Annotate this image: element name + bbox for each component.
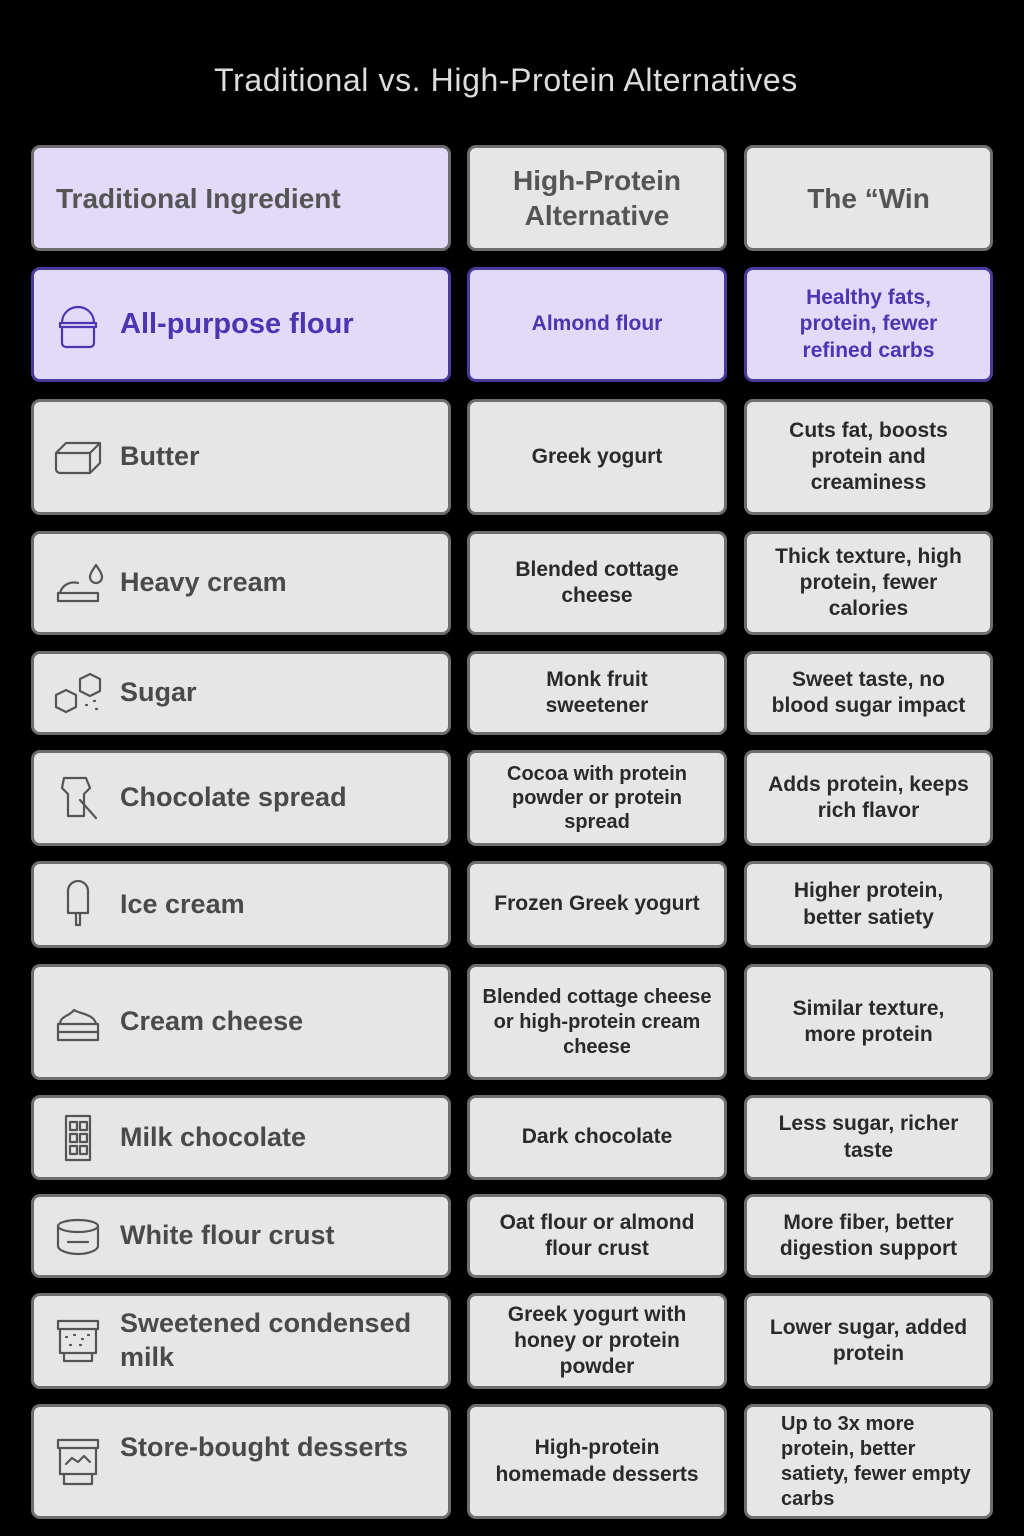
alt: almond flour bbox=[467, 267, 727, 382]
header: alternative: High-Protein Alternative bbox=[513, 165, 681, 231]
alt: frozen greek yogurt bbox=[467, 861, 727, 948]
row: butter bbox=[31, 399, 451, 515]
win: cream cheese bbox=[744, 964, 993, 1080]
row: cream cheese: Cream cheese bbox=[120, 1006, 303, 1036]
row: ice cream bbox=[31, 861, 451, 948]
win: ice cream: Higher protein, better satiety bbox=[794, 879, 943, 928]
row: white flour crust: White flour crust bbox=[120, 1220, 334, 1250]
win: butter bbox=[744, 399, 993, 515]
win: condensed milk: Lower sugar, added protein bbox=[770, 1316, 967, 1365]
row: milk chocolate: Milk chocolate bbox=[120, 1122, 306, 1152]
alt: greek yogurt: Greek yogurt bbox=[532, 445, 662, 468]
alt: frozen greek yogurt: Frozen Greek yogurt bbox=[494, 892, 700, 915]
win: milk chocolate bbox=[744, 1095, 993, 1180]
win: desserts bbox=[744, 1404, 993, 1519]
row: store-bought desserts bbox=[31, 1404, 451, 1519]
win: desserts: Up to 3x more protein, better satiety, fewer empty carbs bbox=[781, 1412, 971, 1510]
win: chocolate spread bbox=[744, 750, 993, 846]
row: store-bought desserts: Store-bought desserts bbox=[120, 1432, 408, 1462]
header: win: The “Win bbox=[807, 182, 930, 214]
alt: cottage or cream cheese bbox=[467, 964, 727, 1080]
row: heavy cream: Heavy cream bbox=[120, 567, 287, 597]
row: chocolate spread: Chocolate spread bbox=[120, 782, 347, 812]
win: heavy cream bbox=[744, 531, 993, 635]
row: condensed milk: Sweetened condensed milk bbox=[120, 1308, 411, 1372]
alt: greek yogurt honey bbox=[467, 1293, 727, 1389]
win: milk chocolate: Less sugar, richer taste bbox=[779, 1112, 958, 1162]
row: flour: All-purpose flour bbox=[120, 308, 354, 340]
row: ice cream: Ice cream bbox=[120, 889, 245, 919]
alt: cottage cheese bbox=[467, 531, 727, 635]
row: sugar bbox=[31, 651, 451, 735]
row: milk chocolate bbox=[31, 1095, 451, 1180]
alt: monk fruit bbox=[467, 651, 727, 735]
header: traditional bbox=[31, 145, 451, 251]
alt: cocoa: Cocoa with protein powder or protein spread bbox=[507, 763, 687, 833]
alt: almond flour: Almond flour bbox=[532, 312, 662, 335]
alt: homemade desserts: High-protein homemade desserts bbox=[495, 1436, 699, 1486]
win: ice cream bbox=[744, 861, 993, 948]
alt: homemade desserts bbox=[467, 1404, 727, 1519]
row: heavy cream bbox=[31, 531, 451, 635]
win: sugar: Sweet taste, no blood sugar impact bbox=[772, 668, 965, 717]
alt: cocoa bbox=[467, 750, 727, 846]
header: alternative bbox=[467, 145, 727, 251]
alt: oat flour crust: Oat flour or almond flour crust bbox=[500, 1211, 694, 1260]
alt: cottage or cream cheese: Blended cottage cheese or high-protein cream cheese bbox=[483, 986, 711, 1058]
win: heavy cream: Thick texture, high protein, fewer calories bbox=[775, 545, 962, 620]
win: chocolate spread: Adds protein, keeps rich flavor bbox=[768, 773, 969, 822]
win: cream cheese: Similar texture, more protein bbox=[793, 997, 944, 1046]
row: cream cheese bbox=[31, 964, 451, 1080]
row: butter: Butter bbox=[120, 441, 200, 471]
win: butter: Cuts fat, boosts protein and creaminess bbox=[789, 419, 948, 494]
alt: greek yogurt bbox=[467, 399, 727, 515]
header: win bbox=[744, 145, 993, 251]
win: crust: More fiber, better digestion support bbox=[780, 1211, 957, 1260]
row: chocolate spread bbox=[31, 750, 451, 846]
row: sugar: Sugar bbox=[120, 677, 197, 707]
alt: greek yogurt honey: Greek yogurt with honey or protein powder bbox=[508, 1303, 686, 1378]
win: flour: Healthy fats, protein, fewer refined carbs bbox=[800, 286, 937, 362]
win: crust bbox=[744, 1194, 993, 1278]
alt: monk fruit: Monk fruit sweetener bbox=[546, 668, 648, 717]
title: Traditional vs. High-Protein Alternatives bbox=[214, 62, 798, 98]
header: traditional: Traditional Ingredient bbox=[56, 182, 341, 214]
alt: oat flour crust bbox=[467, 1194, 727, 1278]
alt: dark chocolate bbox=[467, 1095, 727, 1180]
win: sugar bbox=[744, 651, 993, 735]
win: flour bbox=[744, 267, 993, 382]
row: condensed milk bbox=[31, 1293, 451, 1389]
alt: dark chocolate: Dark chocolate bbox=[522, 1125, 672, 1148]
win: condensed milk bbox=[744, 1293, 993, 1389]
row: flour bbox=[31, 267, 451, 382]
alt: cottage cheese: Blended cottage cheese bbox=[515, 558, 679, 607]
row: white flour crust bbox=[31, 1194, 451, 1278]
